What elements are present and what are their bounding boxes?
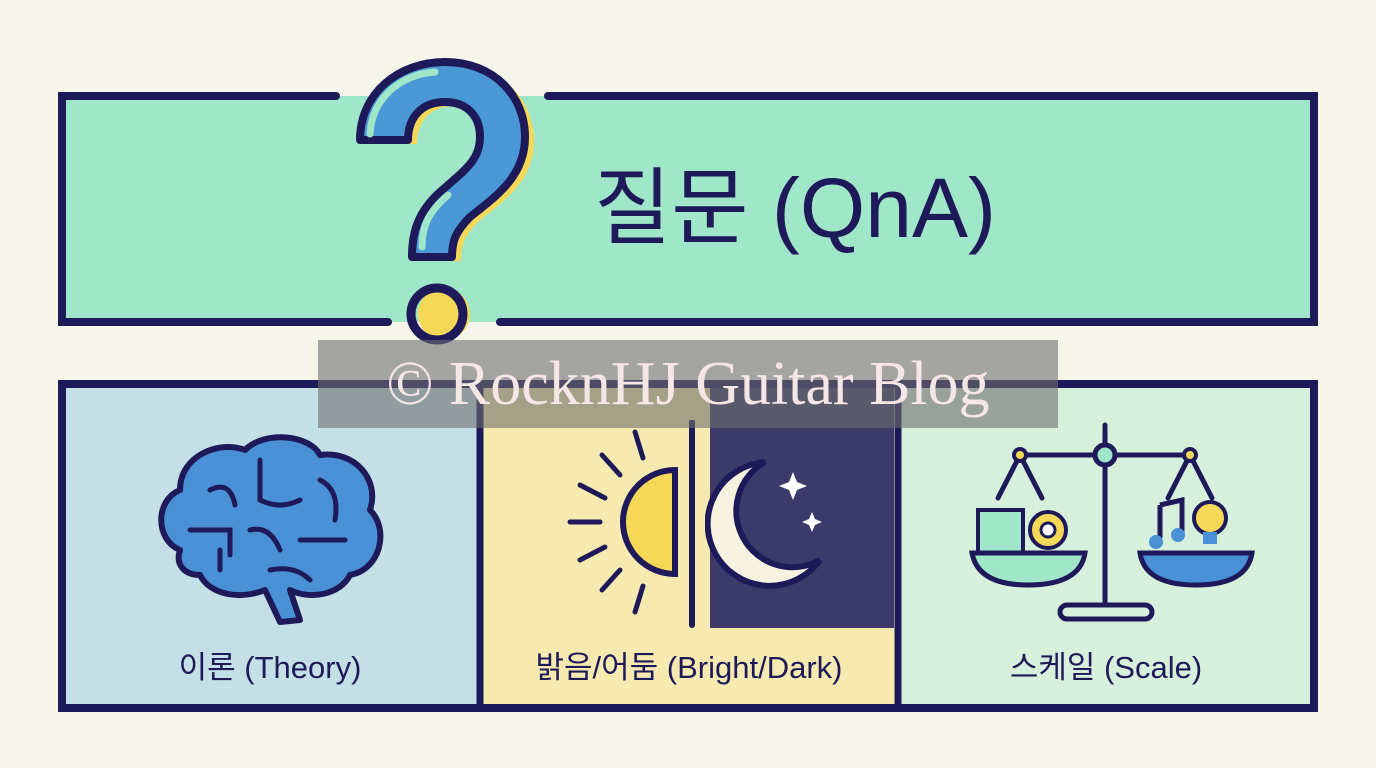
bottom panel [58, 380, 1318, 712]
top banner [58, 92, 1318, 326]
watermark [318, 340, 1058, 428]
label: theory: 이론 (Theory) [179, 650, 361, 685]
icon: sun [568, 420, 695, 628]
icon: question mark [356, 58, 534, 344]
label: scale: 스케일 (Scale) [1010, 650, 1202, 685]
icon: balance scale [969, 422, 1255, 622]
watermark: © RocknHJ Guitar Blog [386, 350, 990, 418]
label: bright/dark: 밝음/어둠 (Bright/Dark) [536, 650, 842, 685]
icon: brain [158, 434, 384, 625]
icon: moon and stars [705, 459, 822, 589]
title: 질문 (QnA) [594, 161, 996, 255]
